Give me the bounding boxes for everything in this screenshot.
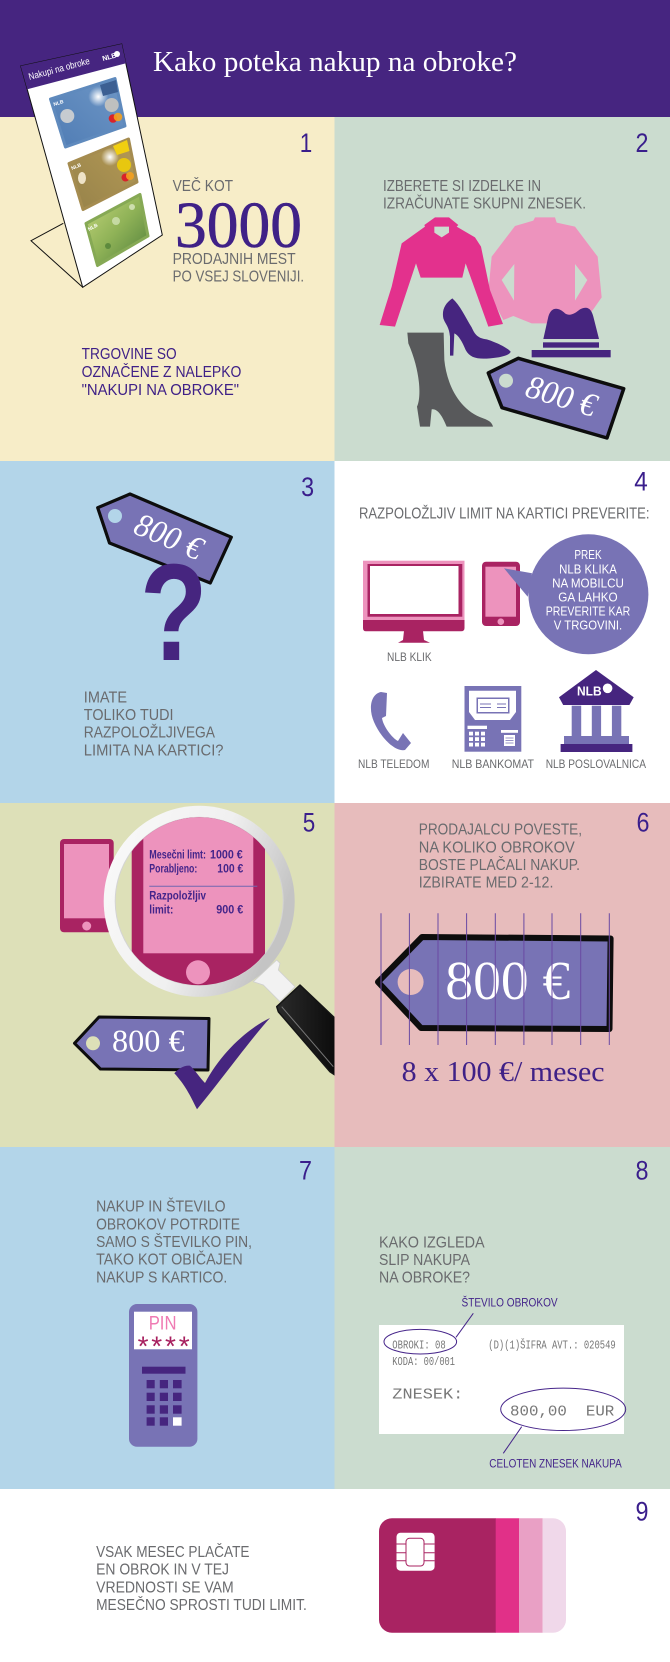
number 6: 6 — [636, 808, 650, 838]
number 7: 7 — [299, 1155, 312, 1185]
icon: monitor — [363, 561, 464, 643]
icon: mobile phone — [482, 562, 520, 626]
icon: magenta jacket — [380, 217, 503, 327]
text: confirm with PIN: OBROKOV POTRDITE — [96, 1216, 240, 1233]
text: what the slip looks like: NA OBROKE? — [379, 1269, 470, 1286]
callout: NLB Klik on mobile: NLB KLIKA — [559, 562, 617, 576]
text: monthly limit release: MESEČNO SPROSTI TUDI LIMIT. — [96, 1595, 307, 1614]
number 8: 8 — [636, 1155, 648, 1185]
icon: question mark: ? — [140, 536, 207, 690]
text: sticker note: "NAKUPI NA OBROKE" — [82, 382, 239, 399]
text: tell the seller: NA KOLIKO OBROKOV — [419, 839, 575, 856]
title: Kako poteka nakup na obroke? — [153, 47, 517, 78]
panel 8: sales slip — [334, 1147, 670, 1489]
icon: hat — [532, 308, 611, 357]
icon: magnifying glass lens — [104, 806, 295, 997]
text: what the slip looks like: KAKO IZGLEDA — [379, 1234, 485, 1251]
icon: bank branch: NLB — [577, 683, 602, 698]
text: limit statement: Razpoložljiv — [149, 890, 207, 902]
label: NLB TELEDOM: NLB TELEDOM — [358, 759, 429, 771]
text: choose products: IZRAČUNATE SKUPNI ZNESEK. — [383, 193, 586, 212]
text: tell the seller: IZBIRATE MED 2-12. — [419, 875, 553, 892]
icon: card display stand: NLB — [53, 99, 65, 108]
text: what the slip looks like: SLIP NAKUPA — [379, 1252, 470, 1269]
text: more than 3000: PO VSEJ SLOVENIJI. — [173, 269, 304, 286]
text: monthly limit release — [96, 1542, 307, 1614]
slip receipt: OBROKI: 08 — [392, 1338, 446, 1352]
icon: bank branch — [559, 670, 634, 752]
callout: installments ellipse — [384, 1313, 473, 1354]
icon: price tag with tick — [74, 1017, 270, 1109]
icon: price tag with tick: 800 € — [112, 1023, 185, 1059]
icon: chip — [396, 1533, 435, 1571]
panel 6: number of installments — [334, 803, 670, 1147]
slip receipt: KODA: 00/001 — [392, 1355, 455, 1369]
icon: ATM — [464, 686, 521, 752]
label: NLB BANKOMAT: NLB BANKOMAT — [452, 759, 534, 771]
icon: high heel shoe — [443, 298, 511, 359]
text: monthly payment: 8 x 100 €/ mesec — [402, 1056, 605, 1088]
icon: clothes — [380, 217, 611, 427]
icon: card display stand: NLB — [87, 222, 99, 233]
text: more than 3000 — [173, 176, 304, 286]
text: what the slip looks like — [379, 1234, 485, 1286]
text: more than 3000: 3000 — [175, 189, 302, 262]
icon: large price tag with division lines — [378, 913, 611, 1045]
text: confirm with PIN: SAMO S ŠTEVILKO PIN, — [96, 1232, 252, 1251]
text: more than 3000: VEČ KOT — [173, 176, 233, 195]
panel 1: points of sale — [0, 44, 334, 461]
text: enough limit: LIMITA NA KARTICI? — [84, 742, 224, 759]
text: enough limit: TOLIKO TUDI — [84, 707, 174, 724]
icon: card display stand: NLB — [71, 162, 83, 172]
text: enough limit: RAZPOLOŽLJIVEGA — [84, 723, 215, 742]
number 1: 1 — [300, 128, 312, 158]
callout: NLB Klik on mobile: PREVERITE KAR — [546, 605, 630, 619]
icon: payment terminal: PIN — [149, 1312, 176, 1334]
text: limit statement: limit: — [149, 904, 173, 916]
slip receipt: 800,00 EUR — [510, 1404, 614, 1421]
callout: NLB Klik on mobile: GA LAHKO — [558, 591, 618, 605]
text: sticker note: OZNAČENE Z NALEPKO — [82, 362, 241, 381]
text: enough limit — [84, 689, 224, 759]
text: limit statement: Porabljeno: — [149, 863, 197, 875]
label: number of installments: ŠTEVILO OBROKOV — [462, 1297, 558, 1310]
icon: price tag: 800 € — [127, 507, 212, 567]
callout: NLB Klik on mobile — [504, 534, 648, 654]
panel 2: choose products — [334, 117, 670, 461]
icon: magnifying glass handle — [253, 960, 335, 1075]
icon: card display stand — [21, 44, 162, 287]
icon: card display stand: Nakupi na obroke — [27, 56, 91, 83]
icon: mobile phone — [60, 839, 114, 932]
number 9: 9 — [636, 1497, 648, 1527]
text: choose products — [383, 178, 586, 212]
text: limit statement: Mesečni limt: — [149, 849, 206, 861]
text: monthly limit release: VREDNOSTI SE VAM — [96, 1579, 234, 1596]
callout: total amount ellipse — [501, 1388, 626, 1453]
text: limit statement: 900 € — [216, 904, 244, 916]
number 4: 4 — [634, 467, 648, 497]
slip receipt: (D)(1)ŠIFRA AVT.: 020549 — [488, 1337, 616, 1352]
text: limit statement: 1000 € — [210, 849, 243, 861]
text: confirm with PIN: NAKUP IN ŠTEVILO — [96, 1197, 226, 1216]
callout: NLB Klik on mobile: PREK — [574, 548, 602, 562]
header band — [0, 0, 670, 117]
number 3: 3 — [301, 472, 314, 502]
text: limit statement — [149, 849, 257, 916]
panel 9: monthly payment — [96, 1502, 648, 1633]
callout: NLB Klik on mobile: NA MOBILCU — [552, 576, 624, 590]
label: NLB POSLOVALNICA: NLB POSLOVALNICA — [546, 759, 646, 771]
slip receipt — [379, 1325, 624, 1434]
icon: card display stand: NLB — [102, 52, 117, 63]
panel 3: check limit question — [0, 461, 334, 803]
icon: price tag — [98, 494, 231, 583]
icon: credit card — [379, 1518, 567, 1633]
icon: price tag — [488, 358, 624, 438]
text: confirm with PIN — [96, 1197, 252, 1286]
label: total amount: CELOTEN ZNESEK NAKUPA — [489, 1458, 622, 1470]
text: sticker note — [82, 346, 241, 399]
text: limit statement: 100 € — [217, 863, 244, 875]
text: sticker note: TRGOVINE SO — [82, 346, 177, 363]
text: tell the seller: BOSTE PLAČALI NAKUP. — [419, 855, 580, 874]
icon: pink shirt — [488, 217, 602, 323]
icon: telephone handset — [371, 692, 411, 750]
text: tell the seller: PRODAJALCU POVESTE, — [419, 822, 582, 839]
slip receipt: ZNESEK: — [392, 1386, 463, 1403]
number 2: 2 — [636, 128, 648, 158]
text: monthly limit release: EN OBROK IN V TEJ — [96, 1562, 229, 1579]
text: confirm with PIN: TAKO KOT OBIČAJEN — [96, 1250, 243, 1269]
label: NLB KLIK: NLB KLIK — [387, 652, 432, 664]
icon: large price tag with division lines: 800 € — [445, 951, 570, 1012]
icon: payment terminal: **** — [138, 1330, 190, 1362]
panel 5: limit check on phone — [0, 803, 335, 1147]
callout: NLB Klik on mobile: V TRGOVINI. — [554, 619, 622, 633]
text: enough limit: IMATE — [84, 689, 127, 706]
panel 4: where to check the limit — [334, 461, 670, 803]
text: choose products: IZBERETE SI IZDELKE IN — [383, 178, 541, 195]
text: confirm with PIN: NAKUP S KARTICO. — [96, 1269, 227, 1286]
icon: price tag: 800 € — [519, 369, 604, 424]
text: tell the seller — [419, 822, 582, 892]
panel 7: PIN confirmation — [0, 1147, 334, 1489]
number 5: 5 — [303, 808, 315, 838]
text: more than 3000: PRODAJNIH MEST — [173, 251, 296, 268]
icon: payment terminal — [129, 1304, 197, 1447]
text: monthly limit release: VSAK MESEC PLAČATE — [96, 1542, 249, 1561]
icon: boot — [407, 333, 493, 427]
